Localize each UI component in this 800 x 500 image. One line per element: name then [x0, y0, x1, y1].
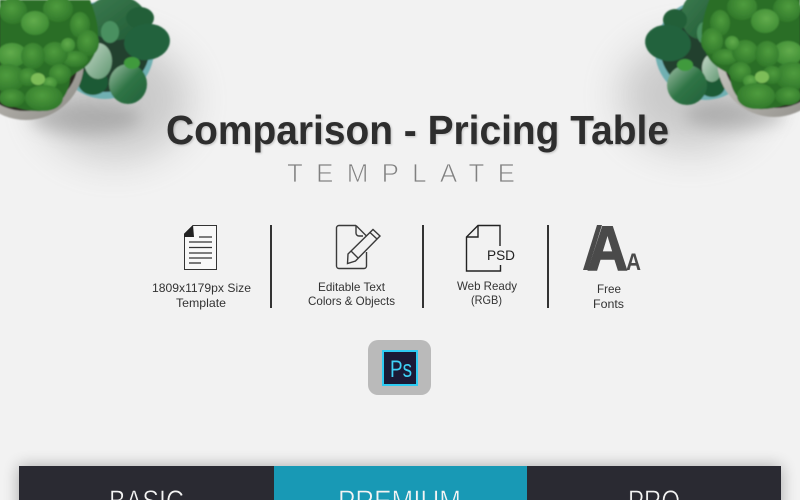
icon: document with pencil — [336, 226, 380, 268]
feature: free fonts: Fonts — [593, 297, 624, 311]
feature: template size — [152, 225, 251, 310]
plant shadow right — [620, 40, 785, 150]
title: Comparison - Pricing Table — [166, 107, 669, 153]
plant shadow left — [30, 40, 190, 160]
feature: template size: Template — [176, 296, 226, 310]
column: pro — [527, 466, 781, 500]
grey pot — [717, 3, 800, 117]
feature: free fonts — [583, 214, 641, 311]
teal pot — [655, 0, 755, 100]
column: basic — [19, 466, 274, 500]
pricing table header — [19, 466, 781, 500]
succulent — [701, 0, 800, 109]
teal pot — [56, 1, 154, 99]
icon: font letters: A — [587, 214, 628, 284]
divider — [547, 225, 549, 308]
rubber plant leaves — [78, 0, 172, 104]
rubber plant leaves — [643, 0, 725, 105]
icon: PSD file: PSD — [487, 247, 515, 263]
plant: right pair of pots — [643, 0, 800, 117]
label: size: 1809x1179px Size — [152, 281, 251, 295]
feature: web ready: (RGB) — [471, 293, 502, 307]
icon: photoshop badge — [368, 340, 431, 395]
label: free fonts: Free — [597, 282, 621, 296]
divider — [270, 225, 272, 308]
succulent — [0, 0, 99, 111]
label: web ready: Web Ready — [457, 279, 517, 293]
column: premium — [274, 466, 527, 500]
subtitle: TEMPLATE — [287, 158, 515, 188]
icon: font letters: A — [626, 249, 641, 276]
feature: editable text: Colors & Objects — [308, 294, 395, 308]
divider — [422, 225, 424, 308]
label: editable: Editable Text — [318, 280, 386, 294]
plant: left pair of pots — [0, 0, 172, 120]
feature: web ready — [457, 226, 517, 307]
feature: editable text — [308, 226, 395, 308]
table shadow — [19, 466, 781, 500]
icon: A4 document — [184, 225, 216, 270]
grey pot — [0, 4, 84, 120]
icon: photoshop badge: Ps — [390, 356, 412, 383]
